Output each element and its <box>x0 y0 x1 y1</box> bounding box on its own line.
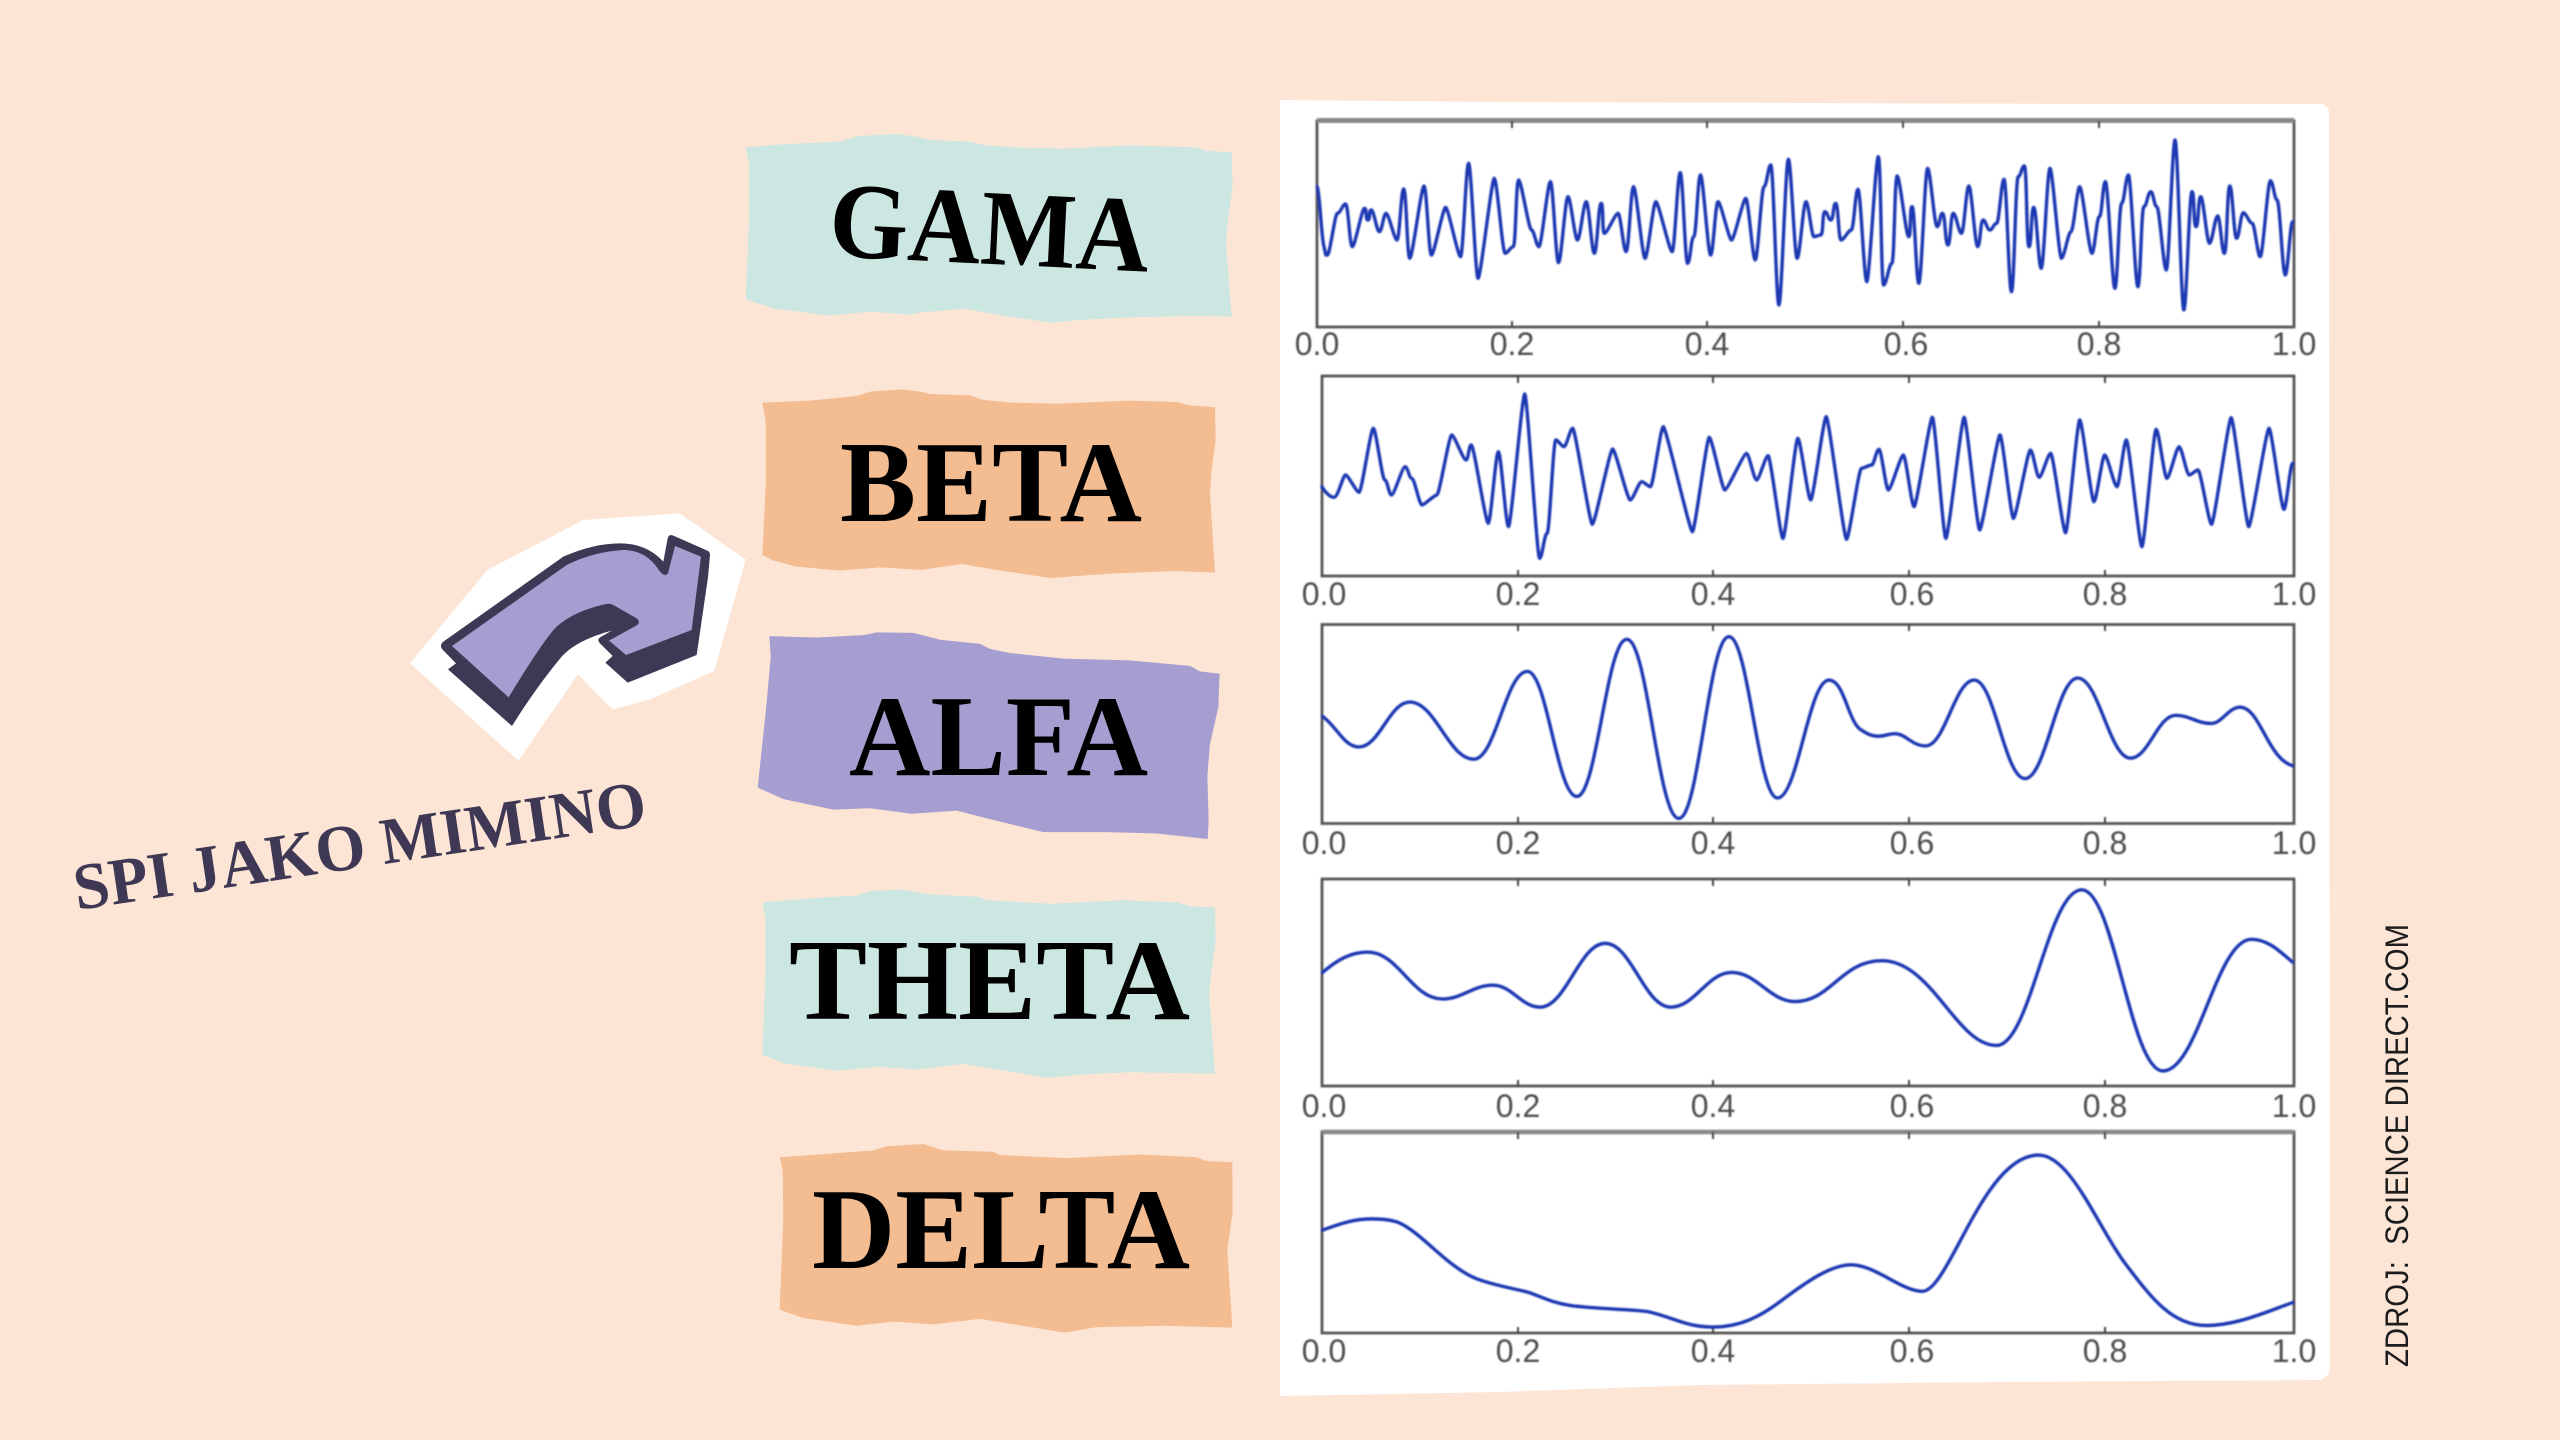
chart: alfa wave: 1.0 <box>2272 825 2316 861</box>
chart: delta wave: 1.0 <box>2272 1333 2316 1369</box>
chart: theta wave: 0.2 <box>1496 1088 1540 1124</box>
label strip: DELTA: DELTA <box>812 1166 1190 1293</box>
chart: gama wave <box>1295 120 2316 362</box>
chart: beta wave: 0.0 <box>1302 576 1346 612</box>
chart: theta wave: 0.8 <box>2083 1088 2127 1124</box>
label strip: GAMA: GAMA <box>827 161 1152 296</box>
chart: gama wave: 0.8 <box>2077 326 2121 362</box>
chart: beta wave: 0.8 <box>2083 576 2127 612</box>
chart: theta wave: 1.0 <box>2272 1088 2316 1124</box>
chart: gama wave: 0.2 <box>1490 326 1534 362</box>
chart: beta wave: 0.4 <box>1691 576 1735 612</box>
label strip: GAMA <box>746 134 1233 323</box>
chart: alfa wave: 0.4 <box>1691 825 1735 861</box>
label strip: THETA: THETA <box>789 917 1190 1044</box>
chart: theta wave <box>1302 879 2316 1124</box>
chart: alfa wave: 0.6 <box>1890 825 1934 861</box>
chart: beta wave: 0.2 <box>1496 576 1540 612</box>
chart: beta wave: 0.6 <box>1890 576 1934 612</box>
chart: alfa wave: 0.2 <box>1496 825 1540 861</box>
label strip: ALFA <box>758 632 1220 839</box>
chart: theta wave: 0.6 <box>1890 1088 1934 1124</box>
chart: delta wave: 0.0 <box>1302 1333 1346 1369</box>
chart: beta wave: 1.0 <box>2272 576 2316 612</box>
source credit: ZDROJ: SCIENCE DIRECT.COM <box>2379 924 2415 1367</box>
chart: theta wave: 0.0 <box>1302 1088 1346 1124</box>
chart: gama wave: 0.6 <box>1884 326 1928 362</box>
chart: beta wave <box>1302 376 2316 612</box>
chart: delta wave <box>1302 1132 2316 1369</box>
chart: alfa wave: 0.8 <box>2083 825 2127 861</box>
chart: gama wave: 0.0 <box>1295 326 1339 362</box>
label strip: BETA <box>762 389 1216 578</box>
chart: gama wave: 1.0 <box>2272 326 2316 362</box>
panel: EEG charts on white paper <box>1280 100 2330 1396</box>
chart: delta wave: 0.8 <box>2083 1333 2127 1369</box>
chart: theta wave: 0.4 <box>1691 1088 1735 1124</box>
chart: delta wave: 0.6 <box>1890 1333 1934 1369</box>
label strip: DELTA <box>780 1144 1233 1333</box>
chart: alfa wave: 0.0 <box>1302 825 1346 861</box>
chart: gama wave: 0.4 <box>1685 326 1729 362</box>
chart: delta wave: 0.2 <box>1496 1333 1540 1369</box>
label strip: THETA <box>762 890 1216 1078</box>
label strip: BETA: BETA <box>840 419 1142 546</box>
label strip: ALFA: ALFA <box>849 673 1148 800</box>
caption: SPI JAKO MIMINO: SPI JAKO MIMINO <box>68 767 651 925</box>
icon: curved arrow sticker <box>410 513 746 761</box>
chart: alfa wave <box>1302 624 2316 861</box>
chart: delta wave: 0.4 <box>1691 1333 1735 1369</box>
